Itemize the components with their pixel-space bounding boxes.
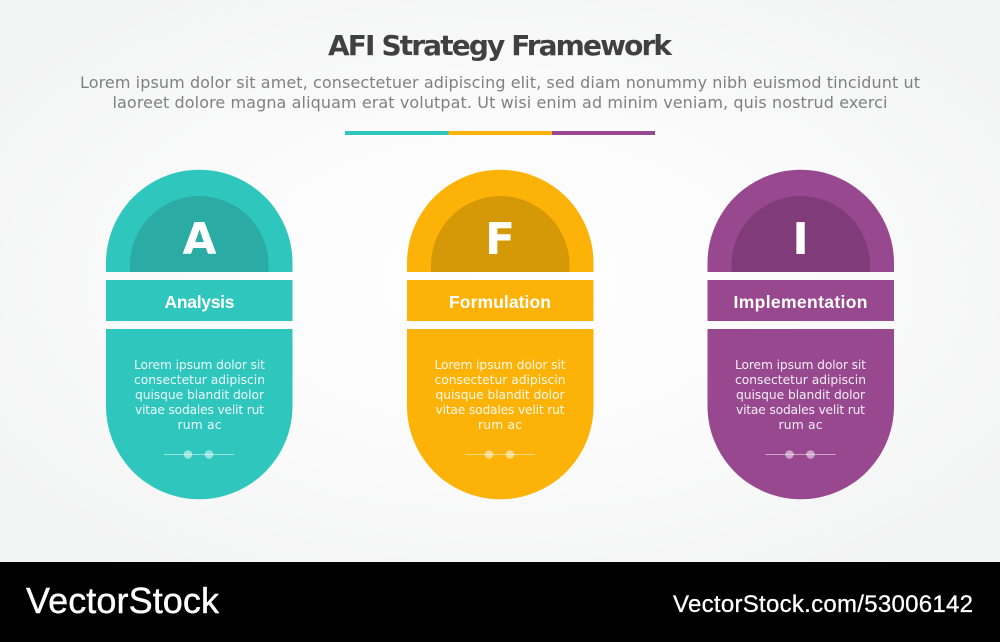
label band — [407, 280, 594, 321]
letter A: A — [182, 214, 217, 265]
panel: Analysis — [106, 170, 292, 499]
body text: consectetur adipiscin — [735, 373, 866, 387]
slider ornament — [465, 450, 535, 459]
body text: rum ac — [178, 418, 222, 432]
slider ornament — [766, 450, 836, 459]
capsule bottom — [106, 329, 292, 499]
body text — [434, 358, 566, 432]
body text: quisque blandit dolor — [436, 388, 565, 402]
label: Formulation — [449, 292, 551, 312]
inner semicircle — [431, 196, 570, 272]
capsule bottom — [407, 329, 594, 499]
body text: consectetur adipiscin — [134, 373, 265, 387]
subtitle text: laoreet dolore magna aliquam erat volutpat. Ut wisi enim ad minim veniam, quis nostrud exerci — [112, 93, 888, 112]
body text: Lorem ipsum dolor sit — [134, 358, 265, 372]
body text: vitae sodales velit rut — [436, 403, 565, 417]
body text: rum ac — [778, 418, 822, 432]
label band — [106, 280, 292, 321]
body text: Lorem ipsum dolor sit — [735, 358, 866, 372]
body text — [134, 358, 265, 432]
VectorStock logo: VectorStock — [26, 580, 220, 621]
letter F: F — [485, 214, 515, 265]
body text: consectetur adipiscin — [434, 373, 566, 387]
label band — [708, 280, 894, 321]
body text: vitae sodales velit rut — [135, 403, 264, 417]
capsule top — [106, 170, 292, 272]
panel: Formulation — [407, 170, 594, 499]
capsule top — [407, 170, 594, 272]
body text: quisque blandit dolor — [135, 388, 265, 402]
watermark footer bar — [0, 562, 1000, 642]
inner semicircle — [130, 196, 268, 272]
body text: rum ac — [478, 418, 522, 432]
image id: VectorStock.com/53006142 — [673, 591, 973, 618]
body text: Lorem ipsum dolor sit — [434, 358, 566, 372]
title: AFI Strategy Framework — [328, 29, 673, 62]
label: Implementation — [734, 292, 868, 312]
body text: quisque blandit dolor — [736, 388, 866, 402]
slider ornament — [164, 450, 234, 459]
body text: vitae sodales velit rut — [736, 403, 865, 417]
panel: Implementation — [708, 170, 894, 499]
capsule bottom — [708, 329, 894, 499]
subtitle text — [80, 73, 920, 112]
label: Analysis — [164, 292, 235, 312]
letter I: I — [792, 214, 809, 265]
capsule top — [708, 170, 894, 272]
subtitle text: Lorem ipsum dolor sit amet, consectetuer adipiscing elit, sed diam nonummy nibh euismod tincidunt ut — [80, 73, 920, 92]
inner semicircle — [732, 196, 870, 272]
tricolor divider — [345, 131, 655, 135]
body text — [735, 358, 866, 432]
